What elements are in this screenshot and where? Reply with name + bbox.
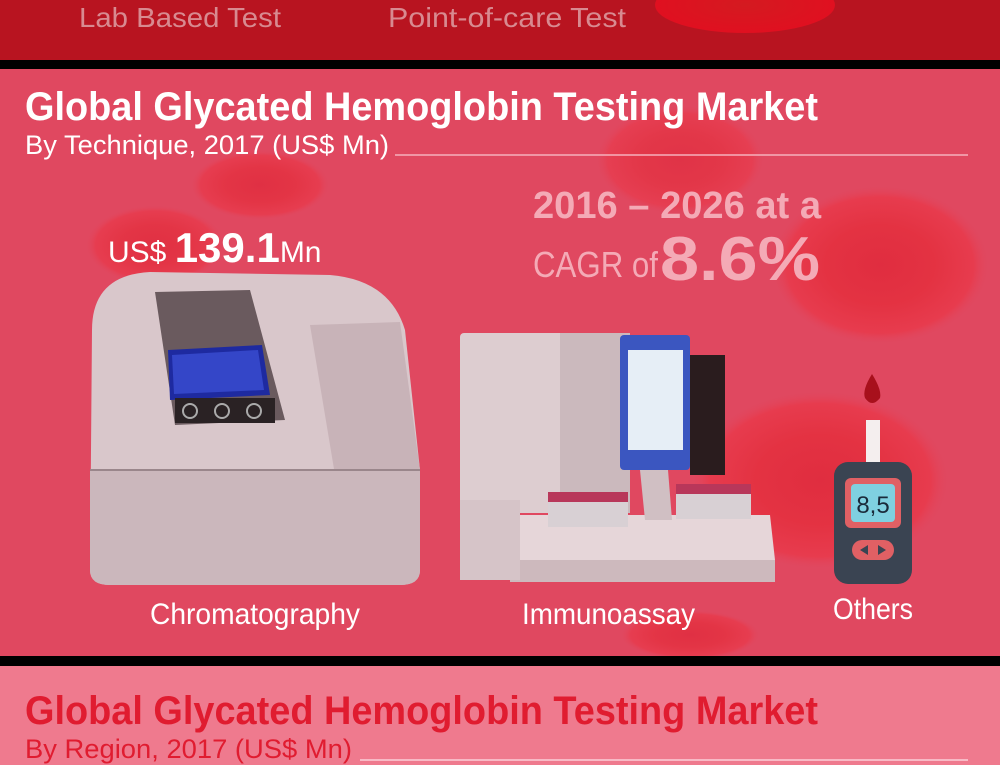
- CAGR callout: 2016 – 2026 at a: [533, 185, 822, 227]
- top label: point of care: Point-of-care Test: [388, 2, 626, 33]
- icon: glucometer: 8,5: [856, 492, 890, 519]
- icon: chromatography machine: [90, 272, 420, 585]
- CAGR callout: 8.6%: [660, 225, 820, 294]
- CAGR callout: [533, 185, 822, 294]
- heading: Global Glycated Hemoglobin Testing Market: [25, 85, 818, 129]
- heading region: Global Glycated Hemoglobin Testing Market: [25, 689, 818, 733]
- label: chromatography: Chromatography: [150, 598, 360, 631]
- subheading region: By Region, 2017 (US$ Mn): [25, 734, 352, 764]
- panel: by region: [0, 666, 1000, 765]
- subheading: By Technique, 2017 (US$ Mn): [25, 130, 389, 160]
- panel: by technique: [0, 69, 1000, 660]
- value callout: US$ 139.1Mn: [108, 224, 322, 271]
- top label: lab based: Lab Based Test: [79, 2, 281, 33]
- top band: [0, 0, 1000, 60]
- icon: glucometer: [834, 374, 912, 584]
- label: others: Others: [833, 593, 913, 626]
- label: immunoassay: Immunoassay: [522, 598, 695, 631]
- icon: immunoassay analyzer: [460, 333, 775, 582]
- CAGR callout: CAGR of: [533, 244, 659, 285]
